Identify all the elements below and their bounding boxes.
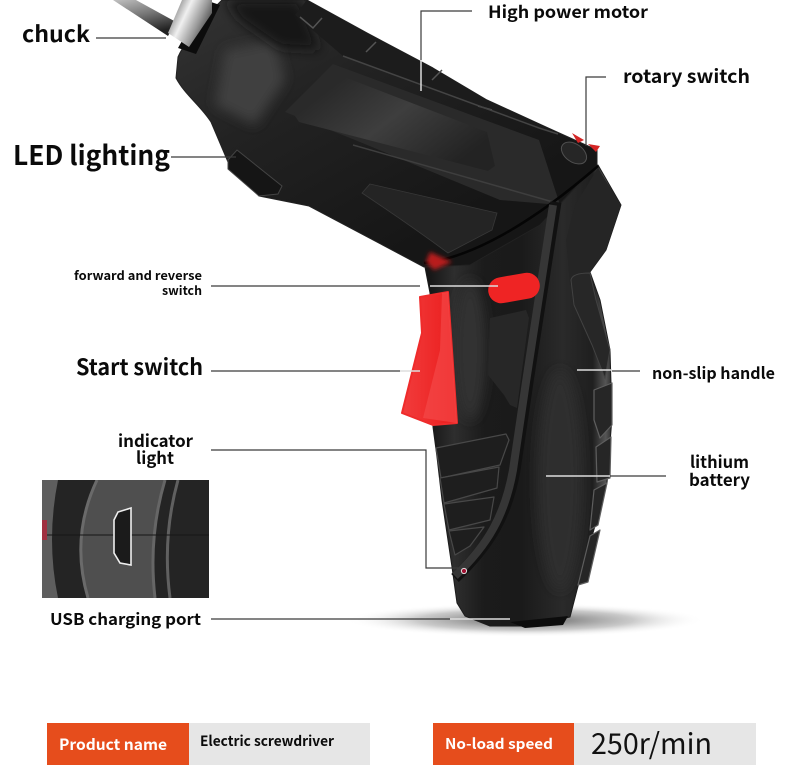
body seam bbox=[424, 166, 598, 263]
spec: no-load speed: No-load speed bbox=[445, 733, 553, 754]
spec: product name: Product name bbox=[59, 733, 167, 755]
base bbox=[510, 616, 568, 628]
icon: micro USB socket bbox=[114, 508, 131, 565]
rotary switch bbox=[557, 138, 591, 168]
spec: product name bbox=[47, 723, 370, 765]
label: USB charging port: USB charging port bbox=[50, 606, 201, 630]
label: non-slip handle: non-slip handle bbox=[652, 360, 775, 384]
label: forward and reverse switch: switch bbox=[162, 280, 202, 299]
spec: product name: Electric screwdriver bbox=[200, 731, 335, 751]
thumb recess bbox=[488, 310, 529, 408]
indicator light bbox=[461, 568, 467, 574]
LED lighting bbox=[228, 150, 282, 196]
upper handle recess bbox=[571, 273, 610, 378]
drill grip bbox=[424, 165, 621, 626]
motor top ribs bbox=[300, 17, 560, 204]
callout leaders bbox=[96, 11, 666, 619]
label: lithium battery: battery bbox=[689, 467, 751, 491]
label: LED lighting: LED lighting bbox=[13, 134, 170, 173]
drill head body bbox=[176, 0, 597, 267]
spec: no-load speed: 250r/min bbox=[591, 721, 712, 763]
label: forward and reverse switch bbox=[74, 265, 202, 299]
forward and reverse switch bbox=[486, 271, 542, 305]
label: forward and reverse switch: forward and reverse bbox=[74, 265, 202, 284]
grip ribs bbox=[436, 434, 509, 555]
drill bit bbox=[113, 0, 176, 36]
trigger bbox=[402, 292, 457, 425]
body sweep line bbox=[455, 202, 556, 578]
red body accents bbox=[426, 252, 452, 270]
label: rotary switch: rotary switch bbox=[623, 62, 750, 89]
head shading bbox=[215, 0, 560, 205]
label: indicator light: light bbox=[136, 444, 174, 469]
label: chuck: chuck bbox=[22, 17, 91, 49]
label: start switch: Start switch bbox=[76, 350, 203, 382]
white leader highlights bbox=[400, 60, 612, 619]
grip right area highlight bbox=[454, 168, 621, 590]
lower panel bbox=[362, 184, 497, 253]
label: lithium battery: lithium bbox=[690, 449, 749, 473]
label: lithium battery bbox=[689, 449, 751, 491]
upper handle cap bbox=[590, 168, 620, 272]
floor shadow bbox=[374, 606, 676, 634]
side panel bbox=[293, 78, 495, 171]
drill illustration bbox=[113, 0, 705, 637]
label: indicator light bbox=[118, 427, 194, 469]
label: indicator light: indicator bbox=[118, 427, 194, 452]
chuck bbox=[168, 0, 220, 54]
USB port inset bbox=[42, 480, 209, 598]
spec: no-load speed bbox=[433, 721, 756, 765]
handle edge segments bbox=[578, 383, 612, 585]
